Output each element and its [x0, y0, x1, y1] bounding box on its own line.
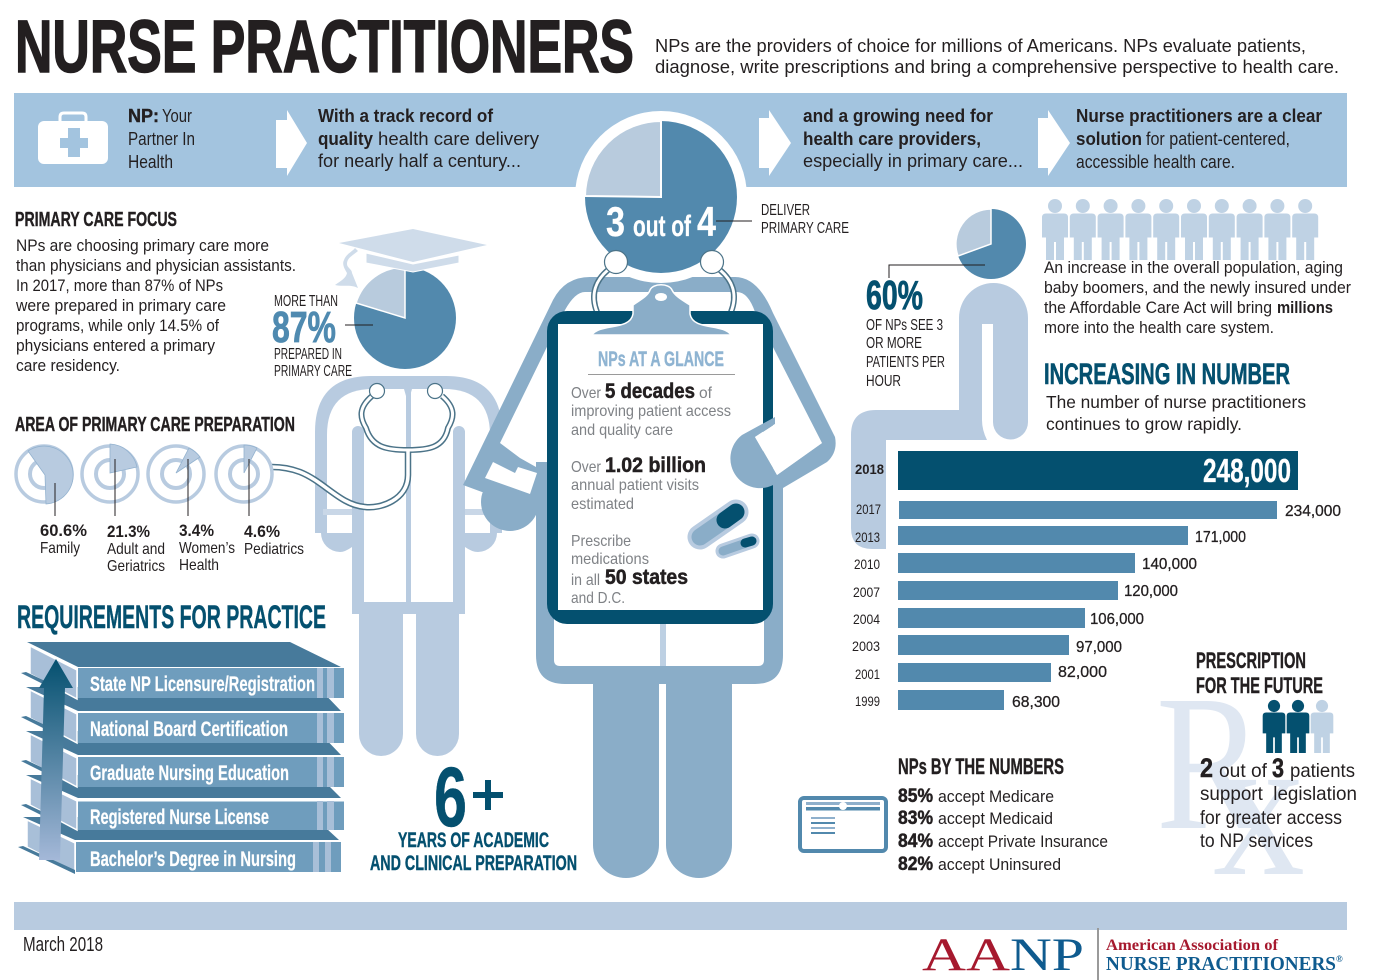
stat: 1.02 billion: annual patient visits — [571, 477, 699, 494]
banner text: partner: Health — [128, 152, 173, 172]
text: 2 out of 3 patients: 3 — [1272, 753, 1284, 783]
book: national board certification — [21, 687, 344, 743]
stack of books — [18, 642, 344, 874]
text: primary care focus: care residency. — [16, 357, 120, 375]
bar 2004 — [853, 608, 1144, 628]
heading: prescription for the future: PRESCRIPTION — [1196, 648, 1306, 673]
stat: medicare — [898, 786, 1054, 807]
center pie: 3 out of 4: 3 — [606, 198, 625, 245]
bar 2007: 2007 — [853, 584, 880, 600]
banner text: track record: health care delivery — [378, 129, 539, 149]
stat: 5 decades: Over — [571, 385, 602, 402]
six plus years: AND CLINICAL PREPARATION — [370, 852, 577, 875]
banner text: solution: accessible health care. — [1076, 152, 1235, 172]
chart: women's health 3.4% — [148, 446, 235, 574]
six plus years: 6 — [434, 750, 467, 844]
bar 1999 — [855, 690, 1060, 711]
text: primary care focus: physicians entered a primary — [16, 337, 216, 355]
book: bachelor's degree — [18, 817, 341, 874]
text: 60% patients per hour: HOUR — [866, 373, 901, 390]
text: primary care focus: In 2017, more than 87% of NPs — [16, 277, 223, 295]
callout: deliver primary care: DELIVER — [761, 202, 810, 219]
bar 2007: 120,000 — [1124, 583, 1178, 600]
bar 1999: 1999 — [855, 693, 880, 709]
bar 2004: 2004 — [853, 611, 880, 627]
stat: uninsured: accept Uninsured — [938, 856, 1061, 874]
stat: medicare: 85% — [898, 786, 933, 807]
center pie: 3 out of 4: out of — [633, 210, 692, 243]
chart: family 60.6%: 60.6% — [40, 522, 87, 540]
chart: adult and geriatrics 21.3%: Adult and — [107, 541, 165, 558]
bar 2001: 82,000 — [1058, 664, 1107, 681]
banner text: growing need — [803, 106, 1023, 171]
stat: medicaid — [898, 808, 1053, 829]
chart: adult and geriatrics 21.3% — [82, 444, 165, 575]
left figure: nurse in light blue coat — [315, 376, 502, 756]
pie head with graduation cap: 87% — [272, 229, 487, 380]
heading: requirements for practice: REQUIREMENTS FOR PRACTICE — [17, 599, 326, 635]
arrow: upward progression — [39, 659, 73, 860]
stat: uninsured: 82% — [898, 854, 933, 875]
icon: pills — [700, 512, 752, 551]
title: NURSE PRACTITIONERS — [15, 5, 634, 88]
arrow 1 — [276, 110, 307, 176]
text: more than 87%: MORE THAN — [274, 293, 338, 310]
stat: 5 decades — [571, 380, 731, 439]
book: national board certification: National Board Certification — [90, 718, 288, 741]
stat: 1.02 billion — [571, 454, 706, 513]
text: continues to grow: continues to grow rapidly. — [1046, 414, 1242, 434]
stat: 1.02 billion: 1.02 billion — [605, 454, 706, 477]
text: population increase: millions — [1277, 299, 1333, 317]
callout: deliver primary care: PRIMARY CARE — [761, 220, 849, 237]
six plus years: YEARS OF ACADEMIC — [398, 829, 549, 852]
right hand and cuff of center figure — [730, 417, 822, 488]
bar 2018: 2018 — [855, 461, 884, 477]
book: graduate nursing education: Graduate Nursing Education — [90, 762, 289, 785]
banner text: growing need: and a growing need for — [803, 106, 993, 126]
NPs by the numbers — [898, 754, 1108, 875]
banner text: solution: solution — [1076, 129, 1142, 149]
logo: AANP — [922, 928, 1343, 980]
stat: uninsured — [898, 854, 1061, 875]
bar 2004: 106,000 — [1090, 611, 1144, 628]
bar 2003: 2003 — [852, 638, 880, 654]
bar 2010 — [854, 553, 1197, 573]
stat: medicaid: 83% — [898, 808, 933, 829]
bar 2017: 2017 — [856, 501, 881, 517]
heading: primary care focus: PRIMARY CARE FOCUS — [15, 209, 177, 231]
icon: two of three people — [1263, 700, 1333, 753]
bar 2013: 171,000 — [1195, 529, 1246, 546]
center figure: coat — [463, 277, 836, 878]
chart: women's health 3.4%: 3.4% — [179, 522, 214, 540]
logo: AANP: American Association of — [1106, 937, 1279, 954]
icon: insurance card — [800, 798, 886, 851]
text: more than 87%: PREPARED IN — [274, 346, 342, 363]
heading: prescription for the future: FOR THE FUTURE — [1196, 673, 1323, 698]
text: 2 out of 3 patients: to NP services — [1200, 830, 1313, 852]
bar chart: number of nurse practitioners — [852, 451, 1341, 711]
bar 2017: 234,000 — [1285, 503, 1341, 520]
intro text — [655, 36, 1339, 77]
logo: AANP: ® — [1336, 954, 1343, 964]
stat: 1.02 billion: estimated — [571, 496, 634, 513]
text: 2 out of 3 patients: patients — [1290, 760, 1355, 782]
bar 2007 — [853, 581, 1178, 600]
clipboard heading: NPs AT A GLANCE — [598, 348, 724, 371]
banner text: partner: Your — [162, 106, 192, 126]
bar 2003 — [852, 635, 1122, 656]
banner text: track record: With a track record of — [318, 106, 494, 126]
book: bachelor's degree: Bachelor’s Degree in Nursing — [90, 848, 296, 871]
clip — [592, 285, 731, 335]
left hand — [481, 473, 539, 531]
stat: private insurance: 84% — [898, 831, 933, 852]
text: population increase: An increase in the overall population, aging — [1044, 259, 1343, 277]
banner text: partner — [128, 106, 195, 172]
text: 2 out of 3 patients: for greater access — [1200, 807, 1342, 829]
text: 2 out of 3 patients: 2 — [1200, 753, 1213, 783]
chart: pediatrics 4.6% — [216, 445, 304, 558]
stat: 5 decades: improving patient access — [571, 403, 731, 420]
heading: prescription for the future — [1196, 648, 1323, 698]
bar 1999: 68,300 — [1012, 694, 1060, 711]
text: 2 out of 3 patients — [1200, 753, 1357, 852]
chart: pediatrics 4.6%: 4.6% — [244, 523, 280, 541]
stat: 5 decades: and quality care — [571, 422, 673, 439]
icon row: crowd of people — [1042, 199, 1318, 260]
stethoscope on center figure — [594, 250, 734, 312]
watermark: Rx: x — [1213, 692, 1305, 919]
text: population increase: the Affordable Care Act will bring — [1044, 299, 1272, 317]
chart: women's health 3.4%: Health — [179, 557, 219, 574]
seated figure with pie head: 60% — [851, 209, 1028, 549]
bar 2017 — [856, 501, 1341, 520]
text: more than 87%: 87% — [272, 303, 336, 352]
stat: 50 states: and D.C. — [571, 590, 625, 607]
stat: private insurance — [898, 831, 1108, 852]
book: state licensure: State NP Licensure/Registration — [90, 673, 315, 696]
logo: AANP: NURSE PRACTITIONERS — [1106, 953, 1336, 975]
left cuff — [485, 462, 537, 494]
text: population increase: more into the health care system. — [1044, 319, 1274, 337]
text: 60% patients per hour: PATIENTS PER — [866, 354, 945, 371]
text: 60% patients per hour: OR MORE — [866, 335, 922, 352]
text: continues to grow: The number of nurse practitioners — [1046, 392, 1306, 412]
banner text: track record: quality — [318, 129, 373, 149]
book: registered nurse license: Registered Nurse License — [90, 806, 269, 829]
banner text: partner: NP: — [128, 106, 159, 126]
banner text: partner: Partner In — [128, 129, 195, 149]
stat: medicaid: accept Medicaid — [938, 810, 1053, 828]
text: continues to grow — [1046, 392, 1306, 434]
text: 60% patients per hour — [866, 272, 945, 390]
text: more than 87%: PRIMARY CARE — [274, 363, 352, 380]
stat: 5 decades: 5 decades — [605, 380, 695, 403]
bar 2018: 248,000 — [1203, 452, 1291, 489]
text: 60% patients per hour: OF NPs SEE 3 — [866, 317, 943, 334]
arrow 3 — [1038, 110, 1070, 176]
icon: graduation cap — [335, 229, 487, 288]
stat: medicare: accept Medicare — [938, 788, 1054, 806]
stethoscope on left figure with tube to charts — [272, 384, 453, 507]
footer band — [14, 902, 1347, 930]
chart: family 60.6%: Family — [40, 540, 80, 557]
logo: AANP: NP — [1010, 929, 1084, 980]
date: March 2018 — [23, 934, 103, 956]
text: primary care focus — [15, 237, 296, 375]
bar 2001: 2001 — [855, 666, 880, 682]
book: state licensure — [21, 642, 344, 699]
banner text: solution — [1076, 106, 1322, 172]
stat: 50 states: medications — [571, 551, 649, 568]
watermark: Rx: R — [1156, 655, 1264, 870]
six plus years — [370, 750, 577, 875]
stat: 50 states: in all — [571, 572, 600, 589]
banner text: growing need: health care providers, — [803, 129, 981, 149]
clipboard — [547, 250, 773, 624]
banner text: growing need: especially in primary care... — [803, 151, 1023, 171]
prescription for the future — [1156, 648, 1357, 919]
center pie: 3 out of 4: 4 — [697, 198, 717, 245]
text: primary care focus: than physicians and physician assistants. — [16, 257, 296, 275]
center pie: 3 out of 4 — [575, 111, 747, 283]
text: more than 87% — [272, 293, 352, 380]
icon: medical kit — [38, 113, 108, 164]
text: 2 out of 3 patients: out of — [1219, 760, 1268, 782]
callout: deliver primary care — [716, 202, 849, 237]
top banner — [14, 93, 1347, 187]
chart: women's health 3.4%: Women’s — [179, 540, 235, 557]
bar 2013: 2013 — [855, 529, 880, 545]
stat: private insurance: accept Private Insurance — [938, 833, 1108, 851]
chart: adult and geriatrics 21.3%: Geriatrics — [107, 558, 165, 575]
text: primary care focus: programs, while only 14.5% of — [16, 317, 219, 335]
text: primary care focus: NPs are choosing primary care more — [16, 237, 269, 255]
banner text: track record: for nearly half a century... — [318, 151, 521, 171]
bar 2010: 2010 — [854, 556, 880, 572]
heading: NPs by the numbers: NPs BY THE NUMBERS — [898, 754, 1064, 779]
chart: adult and geriatrics 21.3%: 21.3% — [107, 523, 150, 541]
chart: family 60.6% — [16, 446, 87, 557]
stat: 5 decades: of — [699, 385, 713, 402]
banner text: track record — [318, 106, 539, 171]
bar 2010: 140,000 — [1142, 556, 1197, 573]
intro text: diagnose, write prescriptions and bring a comprehensive perspective to health care. — [655, 57, 1339, 77]
stat: 50 states: Prescribe — [571, 533, 631, 550]
stat: 1.02 billion: Over — [571, 459, 602, 476]
bar 2001 — [855, 663, 1107, 682]
text: primary care focus: were prepared in primary care — [15, 297, 226, 315]
bar 2018 — [855, 451, 1298, 490]
arrow 2 — [759, 110, 791, 176]
heading: area of primary care preparation: AREA OF PRIMARY CARE PREPARATION — [15, 414, 295, 436]
stat: 50 states: 50 states — [605, 566, 688, 589]
text: 2 out of 3 patients: support legislation — [1200, 783, 1357, 805]
chart: pediatrics 4.6%: Pediatrics — [244, 541, 304, 558]
banner text: solution: for patient-centered, — [1146, 129, 1290, 149]
text: 60% patients per hour: 60% — [866, 272, 923, 318]
text: population increase: baby boomers, and the newly insured under — [1044, 279, 1351, 297]
bar 2003: 97,000 — [1076, 639, 1122, 656]
bar 2013 — [855, 526, 1246, 546]
text: population increase — [1044, 259, 1351, 337]
stat: 50 states — [571, 533, 688, 607]
logo: AANP: AA — [922, 929, 1010, 980]
book: graduate nursing education — [21, 731, 344, 787]
banner text: solution: Nurse practitioners are a clear — [1076, 106, 1322, 126]
intro text: NPs are the providers of choice for millions of Americans. NPs evaluate patients, — [655, 36, 1306, 56]
book: registered nurse license — [21, 775, 344, 830]
